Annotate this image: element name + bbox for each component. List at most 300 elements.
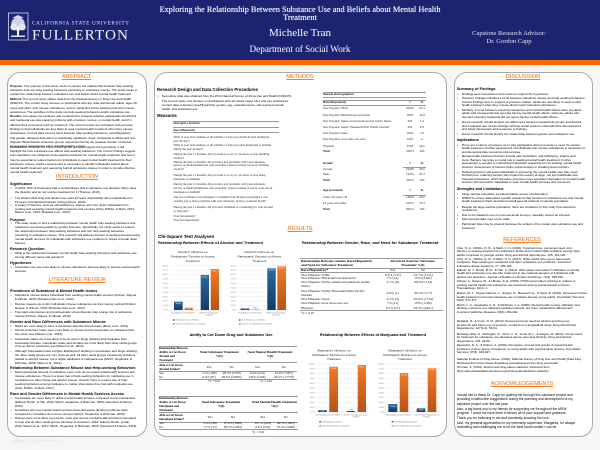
chart: marijuana and substance treatment: 100.00%	[309, 364, 316, 366]
table: sample demographics: 26312	[406, 106, 414, 110]
chart: marijuana and substance treatment: 40.00%	[310, 392, 316, 394]
strengths bullet one: Large sample population provided reliable source of information.	[462, 192, 548, 196]
table: ability to cut down alcohol: *p < 0.01	[208, 379, 221, 383]
table: ability to cut down marijuana: 8.6% (232)	[255, 425, 270, 429]
research design bullets	[158, 94, 292, 112]
table: measures descriptive statistics: past 30 days?	[174, 139, 190, 143]
significance bullet three: seeking and receiving mental health treatment and services (Choi, DiNitto, & Marti, 2014;	[15, 207, 135, 211]
chart: alcohol and mental health treatment: 70.00%	[231, 279, 237, 281]
table: ability to cut down alcohol: Relationship Between	[159, 346, 188, 350]
reference two: marijuana: Help-seeking for marijuana and other substance use problems. Journal of	[457, 260, 571, 264]
gender bullet two: any other race (Mason et al., 2013).	[15, 332, 63, 336]
table: sample demographics: 100	[420, 149, 424, 153]
chart: marijuana and substance treatment: 90.00%	[310, 368, 316, 370]
table: measures descriptive statistics: During the past 12 months, did you need treatment or counseling for your alcohol	[174, 205, 273, 209]
acknowledgement paragraph two	[456, 407, 567, 420]
table: measures descriptive statistics: or drug use?	[174, 209, 189, 213]
chart: alcohol and mental health treatment: 40.00%	[231, 292, 237, 294]
abstract results: and gender, although data was not statistically significant, need. Compared to White and non-	[10, 136, 136, 140]
research question bullet: among different races and genders?	[15, 255, 64, 259]
table: ability to cut down marijuana	[159, 396, 298, 434]
table: sample demographics: 1844	[407, 131, 413, 135]
abstract conclusion: how substance use influences help-seeking behaviors for mental health treatment and how it	[10, 153, 135, 157]
chart: marijuana and substance treatment: Participants' Decision to Access	[312, 353, 356, 357]
race and gender access heading: Race and Gender Differences in Mental Health Services Access	[10, 392, 124, 396]
table: sample demographics: 55271	[406, 207, 414, 211]
implications bullet three: services and promotion individuals to seek mental health services and resources.	[462, 180, 571, 184]
abstract method	[10, 97, 137, 114]
table: ability to cut down alcohol: *p < 0.01	[260, 379, 273, 383]
research question heading: Research Question	[10, 246, 45, 250]
reference seven: Mojtabai, R., & Crum, R. M. (2013). Perceived unmet need for alcohol and drug use	[457, 319, 569, 323]
chart: alcohol and mental health treatment: 100.00%	[230, 265, 237, 267]
reference ten: Retrieved from https://www.drugabuse.gov/national-survey-drug-use-health	[457, 361, 558, 365]
reference eleven: https://americanaddictioncenters.org/rehab-guide/addiction-statistics	[457, 369, 549, 373]
strengths bullet six: treatment.	[462, 226, 475, 230]
access bullet one	[10, 397, 135, 409]
reference seven: treatments and future use of services: results from a longitudinal study. Drug and Alcohol	[457, 322, 576, 326]
chart: marijuana and substance treatment: 50.00%	[310, 388, 316, 390]
heading: introduction: INTRODUCTION	[56, 174, 98, 180]
reference five: 64(9), 871-877.	[457, 298, 478, 302]
table: gender race need for treatment: Non-Hispanic Asian	[301, 297, 329, 301]
access bullet one: 2016).	[15, 404, 24, 408]
author name: Michelle Tran	[269, 26, 331, 38]
table: ability to cut down marijuana: Marijuana Intake*	[159, 417, 184, 421]
relationship bullet: misuse substances. There is a lower rate of help-seeking behaviors for marijuana use in	[15, 374, 133, 378]
reference six: Journal of addictive diseases, 28(4), 281-292.	[457, 310, 518, 314]
significance bullet two: 18 years old (National Institute of Drug Abuse, 2016).	[15, 200, 87, 204]
advisor credit: Dr. Gordon Capp	[487, 38, 531, 45]
poster title: Exploring the Relationship Between Substance Use and Beliefs about Mental Health	[159, 5, 441, 14]
strengths bullet two: health treatment which described overall general analysis of sample population.	[462, 199, 569, 203]
purpose bullet	[10, 222, 140, 245]
chart: marijuana and substance treatment: Did NOT Their Marijuana Causes	[344, 413, 369, 416]
acknowledgement paragraph one: capstone project over the last year.	[457, 402, 509, 406]
chart: alcohol and substance treatment: 0.00%	[163, 310, 169, 312]
table: sample demographics: 75.4	[419, 201, 425, 205]
chart: marijuana and mental health treatment: Problems	[423, 416, 431, 419]
table: measures descriptive statistics: causing you to have problems with your emotions, nerves, or mental health?	[174, 199, 266, 203]
table: sample demographics: 224	[408, 125, 412, 129]
acknowledgement paragraph one: providing constructive suggestions during the planning and development of my	[457, 397, 573, 401]
chart: alcohol and mental health treatment: 4.20%	[243, 309, 248, 311]
implications bullet two: assessment is needed to understand individuals' reasoning for not seeking mental health	[462, 161, 581, 165]
university logo: FULLERTON	[32, 26, 128, 43]
hypotheses bullet: Caucasian men are more likely to misuse substances and less likely to access mental health	[15, 265, 140, 269]
table: gender race need for treatment: 93% (5497)	[415, 276, 432, 280]
gender bullet three: Caucasian males are more likely to be at risk for binge drinking and marijuana than	[15, 337, 127, 341]
chart: alcohol and substance treatment: 20.00%	[163, 301, 169, 303]
significance bullets: the disorder and do not receive treatment for it (Thomas, 2019).	[15, 190, 101, 194]
advisor credit: Capstone Research Advisor:	[472, 30, 546, 37]
chart: alcohol and mental health treatment: Alcohol's Influence on	[244, 250, 275, 254]
chart: marijuana and mental health treatment: 20.00%	[379, 402, 385, 404]
table: sample demographics: Non-Hispanic White	[323, 106, 348, 110]
reference eight: Mulvaney-Day, N., DeAngelo, D., Chen, C. N., Cook, B. L., & Alegria, M. (2012). Unmet need	[457, 332, 582, 336]
table: measures descriptive statistics: nerves, or mental health that were probably caused or made worse by your use of	[174, 186, 272, 190]
table: measures descriptive statistics: During the past 12 months, did you have any problems with your emotions,	[174, 160, 266, 164]
chart: alcohol and substance treatment: 30.00%	[163, 296, 169, 298]
table: gender race need for treatment: 8.3% (137)	[385, 273, 401, 277]
abstract conclusion: may be essential to reduce barriers for individuals to seek mental health treatment for their	[10, 158, 132, 162]
table: gender race need for treatment: 4.1% (3)	[387, 297, 399, 301]
reference four: seeking mental health and substance use treatment among sexual assault survivors.	[457, 283, 571, 287]
table: ability to cut down marijuana: 1.7% (33)	[203, 425, 217, 429]
implications bullet three: misused substances, which therefore promotes more accurate information on mental health	[462, 177, 585, 181]
chart: marijuana and mental health treatment: Need Mental Health Treatment	[394, 420, 418, 423]
chart: alcohol and substance treatment: Alcohol's Influence on	[178, 250, 208, 254]
table: gender race need for treatment: *p < 0.01	[301, 311, 314, 315]
alcohol subheading: Relationship Between Effects of Alcohol and Treatment	[158, 240, 263, 244]
gender bullet four: Richman, 2009; Merly et al., 2014).	[15, 361, 62, 365]
significance bullets: In 2019, 20% of Americans had a mental illness and a substance use disorder. Many have	[15, 186, 136, 190]
reference list: Choi, N. G., DiNitto, D. M., & Marti, C. N. (2015). Treatment use, perceived need, and	[457, 246, 572, 250]
table: measures descriptive statistics: alcohol?	[174, 156, 184, 160]
chart: marijuana and mental health treatment: 40.00%	[379, 392, 385, 394]
reference eight: for treatment for substance use disorders across race and ethnicity. Drug and alcohol	[457, 335, 571, 339]
reference list	[456, 246, 580, 256]
table: ability to cut down alcohol: Ability to Cut Down	[159, 350, 186, 354]
table: ability to cut down alcohol: Treatment	[159, 358, 173, 362]
access bullet two: compared to nonwhites do not use services (Mirich, Negandra, & Richman, 2009).	[15, 412, 125, 416]
chart: marijuana and substance treatment: 20.00%	[310, 402, 316, 404]
reference list: adults compared to younger adults. Drug and alcohol dependence, 145, 113-120.	[457, 252, 566, 256]
relationship bullet: seeking behaviors among marijuana no matter what status they had with marijuana use	[15, 382, 133, 386]
abstract results: substances. Current data found a trend between help-seeking behaviors, race/Hispanicity,	[10, 131, 131, 135]
strengths bullet six: Participant bias may be present because the subject of the matter was substance use and	[462, 222, 583, 226]
acknowledgement paragraph two: program. I could not have done it without all of your support and guidance.	[457, 411, 567, 415]
chart: marijuana and substance treatment: Marijuana's Influence on	[317, 348, 351, 352]
research design bullets: Current data examines race/Hispanicity, gender, age, education level, self-reported overall	[162, 103, 283, 107]
chart: marijuana and substance treatment: 97.60%	[331, 368, 337, 370]
significance bullet three: Mason et al., 2013; Mojtabai et al., 2014).	[15, 210, 71, 214]
abstract method: substances. The variables in this study are help-seeking behaviors and/or substance use.	[10, 110, 131, 114]
table: sample demographics: Under 18 years old	[323, 195, 347, 199]
chi-square heading: Chi-Square Test Analyses	[158, 234, 214, 238]
reference four: Kirkner, A., Relyea, M., & Ullman, S. E. (2018). PTSD and problem drinking in relation to	[457, 279, 575, 283]
table: sample demographics: %	[421, 100, 423, 104]
panel: methods and results: Ever had depression?	[174, 218, 200, 222]
chart: alcohol and mental health treatment: Participants' Decision to Access	[238, 254, 282, 258]
summary bullet three: adults who misused alcohol reported having mental health effects; whereas, adults who	[462, 111, 579, 115]
prevalence bullet one: & Ullman, 2018; Mulvaney-Day et al., 2012).	[15, 297, 75, 301]
chart: alcohol and mental health treatment: 10.00%	[231, 305, 237, 307]
chart: alcohol and substance treatment: 50.00%	[163, 288, 169, 290]
table: sample demographics: 6734	[407, 144, 413, 148]
table: sample demographics: Race/Hispanicity	[323, 100, 346, 104]
table: sample demographics: 1251	[407, 137, 413, 141]
chart: alcohol and substance treatment: 10.00%	[163, 305, 169, 307]
chart: marijuana and substance treatment: 70.00%	[310, 378, 316, 380]
chart: alcohol and substance treatment: Treatment	[186, 259, 200, 263]
chart: alcohol and substance treatment: Did NOT Their Alcohol Causes Problems	[176, 323, 206, 326]
summary bullet two: health treatment when they misuse alcohol and marijuana substances.	[462, 103, 557, 107]
gender bullet one: Males are more likely to have a substance disorder than females (Merly et al., 2014).	[15, 324, 129, 328]
table: sample demographics: Non-Hispanic Native American/American Indian Native	[323, 119, 392, 123]
strengths bullet three	[457, 206, 576, 213]
reference eight: dependence, 125, 44-50.	[457, 339, 491, 343]
heading: references: REFERENCES	[503, 236, 541, 242]
summary bullet one: Findings were inconsistent and could not support the hypothesis.	[462, 92, 549, 96]
table: sample demographics: 4.4	[420, 131, 424, 135]
abstract results: Hispanic Black/African American groups responded having the greatest number of alcohol	[10, 140, 131, 144]
gender bullet two: African American males were more likely to misuse and be dependent on marijuana than	[15, 328, 134, 332]
implications heading: Implications	[457, 138, 479, 142]
chart: marijuana and mental health treatment: 70.00%	[379, 378, 385, 380]
table: ability to cut down alcohol: 91.6% (7607)	[275, 371, 293, 375]
table: sample demographics: 18 years and older	[323, 201, 347, 205]
table: ability to cut down marijuana: Ability to Cut Down	[159, 400, 186, 404]
table: sample demographics: Total	[323, 178, 330, 182]
chart: marijuana and mental health treatment: 30.00%	[379, 397, 385, 399]
chart: marijuana and mental health treatment: 82.70%	[401, 374, 407, 376]
table: gender race need for treatment: Non-Hispanic more than one race	[301, 301, 348, 305]
chart: alcohol and mental health treatment: 0.90%	[253, 308, 258, 310]
chart: alcohol and mental health treatment: 99.10%	[279, 268, 285, 270]
reference eight	[456, 332, 582, 343]
table: gender race need for treatment: Native	[301, 284, 310, 288]
table: ability to cut down alcohol: No	[159, 375, 163, 379]
reference five: Mason, M. J., Keyser-Marcus, L., Snipes, D., Benotsch, E., & Sood, B. (2013). Perceived mental	[457, 291, 586, 295]
table: sample demographics: 19412	[406, 172, 414, 176]
chart: alcohol and substance treatment: 81.20%	[202, 276, 208, 278]
access bullet three: to men and all other racial groups (Norhrup & Gunnison, 2018; Edlund, Booth, & Han,	[15, 420, 130, 424]
table: sample demographics: Male	[323, 172, 329, 176]
chart: alcohol and substance treatment: 40.00%	[163, 292, 169, 294]
chart: alcohol and substance treatment: Their Alcohol Causes Problems	[171, 311, 195, 314]
reference eleven	[456, 365, 550, 373]
implications bullet two: more. Barriers may play a crucial role in seeking mental health treatment. Further	[462, 158, 571, 162]
chart: alcohol and substance treatment: 94.50%	[212, 270, 218, 272]
table: sample demographics: 0.5	[420, 125, 424, 129]
orange stripe	[0, 60, 600, 65]
abstract results: affected their perceived need for treatment. The current results are consistent with previous	[10, 123, 133, 127]
summary bullet four	[457, 121, 581, 132]
chart: alcohol and mental health treatment: 95.80%	[269, 270, 275, 272]
summary bullet four: and adapt intervention and resources to findings.	[462, 127, 528, 131]
gender bullet four: Although Caucasians have a higher likelihood of drinking to intoxication and binge drinking,	[15, 349, 138, 353]
abstract text: explain the relationship between substance use and beliefs about mental health treatment.	[10, 92, 132, 96]
table: ability to cut down alcohol: 1.5% (109)	[202, 371, 216, 375]
prevalence bullet two: Diverse reasons as to why individuals choose substances as their coping method (Kirkner,	[15, 302, 136, 306]
table: sample demographics: f	[410, 100, 411, 104]
table: sample demographics: 1.6	[420, 119, 424, 123]
strengths bullet four: Due to the dataset's use of cross-sectional surveys, causality cannot be inferred.	[462, 213, 570, 217]
reference five: health treatment need and substance use correlates among young adults. Psychiatric Services,	[457, 295, 585, 299]
reference three	[456, 268, 579, 279]
significance heading: Significance	[10, 182, 32, 186]
heading: acknowledgements: ACKNOWLEDGEMENTS	[491, 380, 553, 386]
chart: marijuana and mental health treatment: 50.00%	[379, 388, 385, 390]
table: ability to cut down marijuana: Need Substance Treatment	[202, 400, 240, 404]
table: ability to cut down marijuana: 98.3% (2582)	[224, 425, 242, 429]
summary bullet five: Future research should identify the relationship between gender and substance use.	[462, 132, 575, 136]
acknowledgement paragraph two: Also, a big thank you to my friends for supporting me throughout the MSW	[457, 407, 566, 411]
strengths bullet two: NSDUH's survey data asked specific questions that focused on substance use and mental	[462, 196, 583, 200]
chart: marijuana and mental health treatment: Marijuana's Influence on	[388, 348, 422, 352]
abstract method: Method: The current study utilizes data from the National Survey on Drug Use and Health	[10, 97, 131, 101]
summary bullet three: reported misusing marijuana did not report having mental health effects.	[462, 115, 559, 119]
hypotheses heading: Hypotheses	[10, 260, 32, 264]
chart: alcohol and mental health treatment: Treatment	[252, 259, 266, 263]
poster footer credit	[12, 440, 60, 444]
table: gender race need for treatment: 93% (1109)	[415, 301, 432, 305]
table: ability to cut down marijuana: No	[231, 415, 235, 419]
table: sample demographics: Sample Demographics	[323, 92, 354, 96]
implications bullet one: provide appropriate resources and services.	[462, 150, 521, 154]
table: sample demographics: %	[421, 188, 423, 192]
table: sample demographics: 22259	[406, 167, 414, 171]
table: measures descriptive statistics: Race/Hispanicity	[174, 128, 195, 132]
access bullet one: Caucasians are more likely to utilize mental health services compared to non-Caucasians	[15, 396, 135, 400]
table: sample demographics: f	[410, 161, 411, 165]
summary bullet three: Similarly, a trend between misusing substances and mental health effects were prevalent;	[462, 108, 582, 112]
abstract conclusion: highlight the how substance use affects help-seeking behaviors. The current findings suggest	[10, 149, 135, 153]
table: sample demographics: Total	[323, 149, 330, 153]
chart: marijuana and substance treatment: Treatment	[327, 357, 341, 361]
marijuana relationship heading: Relationship Between Effects of Marijuana and Treatment	[320, 332, 426, 337]
table: ability to cut down alcohol: No	[282, 365, 286, 369]
chart: alcohol and mental health treatment: Did NOT Their Alcohol Causes Problems	[242, 323, 272, 326]
acknowledgement paragraph one	[456, 393, 573, 406]
chart: alcohol and substance treatment: 18.80%	[176, 303, 182, 305]
purpose bullet: mental health services for individuals with substance use problems in hopes to break down	[15, 237, 137, 241]
table: sample demographics: 41671	[406, 149, 414, 153]
acknowledgement paragraph one: I would like to thank Dr. Capp for guiding me through this capstone project and	[457, 393, 573, 397]
table: ability to cut down alcohol: No	[230, 365, 234, 369]
chart: alcohol and mental health treatment: 60.00%	[231, 283, 237, 285]
reference six: drinking outcomes in a national population sample: are there racial/ethnic differences?.	[457, 306, 574, 310]
table: sample demographics: f	[410, 188, 411, 192]
implications bullet one: There are a variety of reasons as to why participants did not perceive a need for mental	[462, 143, 579, 147]
table: ability to cut down alcohol: Able to Cut Down	[159, 363, 183, 367]
table: sample demographics: 41671	[406, 178, 414, 182]
table: ability to cut down marijuana: 2.4% (46)	[203, 421, 217, 425]
table: gender race need for treatment: Yes	[390, 268, 395, 272]
header band	[0, 0, 600, 65]
chart: marijuana and mental health treatment: 91.40%	[429, 370, 435, 372]
chart: alcohol and substance treatment: 80.00%	[163, 274, 169, 276]
table: ability to cut down marijuana: Yes	[207, 415, 213, 419]
table: gender race need for treatment: Non-Hispanic Native American/American Indian	[301, 280, 370, 284]
acknowledgement paragraph three: Last, my greatest appreciation to my internship supervisor, Margarita, for always	[457, 421, 575, 425]
table: ability to cut down alcohol: 98.5% (7250)	[223, 371, 241, 375]
table: ability to cut down alcohol: 6.8% (1299)	[249, 375, 266, 379]
relationship bullet	[10, 371, 135, 391]
chart: marijuana and mental health treatment	[378, 348, 440, 428]
chart: alcohol and mental health treatment: 0.00%	[231, 310, 237, 312]
significance bullet two	[10, 197, 133, 204]
chart: alcohol and substance treatment: Their Alcohol Causes Problems	[176, 319, 199, 322]
abstract text: behaviors and non help-seeking behaviors pertaining to substance misuse. The study seeks to	[10, 88, 137, 92]
table: ability to cut down alcohol: 99.6% (20395)	[222, 375, 242, 379]
purpose bullet: This study seeks to find a relationship between mental health help-seeking behaviors and	[15, 221, 135, 225]
hypotheses bullet: services.	[15, 269, 27, 273]
table: sample demographics: Non-Hispanic more than one race	[323, 137, 366, 141]
strengths bullet three: considered.	[462, 208, 477, 212]
prevalence bullet three: Traumatic experiences and posttraumatic stress disorder play a large role in substance	[15, 310, 132, 314]
abstract conclusion	[10, 145, 136, 174]
chart: alcohol and substance treatment: 5.50%	[186, 309, 192, 311]
table: gender race need for treatment: 9.6% (1)	[387, 291, 399, 295]
table: ability to cut down alcohol: Yes	[206, 365, 212, 369]
abstract results: consumption compared to other race/Hispanicity groups.	[10, 144, 86, 148]
table: measures descriptive statistics: during the past 30 days?	[174, 147, 203, 151]
table: ability to cut down alcohol: Yes	[159, 371, 164, 375]
reference ten	[457, 357, 582, 365]
panel: discussion, references, acknowledgements	[454, 72, 592, 437]
significance bullet two: The lifetime illicit drug and alcohol use rates increase dramatically when individuals turn	[15, 196, 133, 200]
table: sample demographics: 100	[420, 207, 424, 211]
prevalence bullet three: misuse (Kirkner, Relyea, & Ullman, 2018).	[15, 314, 71, 318]
heading: literature review: LITERATURE REVIEW	[48, 277, 106, 283]
prevalence heading: Prevalence of Substance & Mental Health Issues	[10, 289, 97, 293]
chart: alcohol and substance treatment: 70.00%	[163, 279, 169, 281]
chart: alcohol and mental health treatment: 30.00%	[231, 296, 237, 298]
department: Department of Social Work	[250, 44, 350, 54]
table: gender race need for treatment: Treatment %(f)	[401, 263, 424, 267]
research question bullet: What is the relationship between mental health help-seeking behaviors and substance use	[15, 251, 137, 255]
summary bullet three	[457, 109, 582, 119]
table: gender race need for treatment: Perceived Need for Substance	[391, 259, 435, 263]
table: ability to cut down marijuana: No	[284, 415, 288, 419]
implications bullet two: services. Assessment of barriers helps social workers in breaking down barriers.	[462, 164, 570, 168]
access bullet three	[10, 417, 137, 429]
access bullet one: (Edlund, Booth, & Han, 2012; Mirich, Negandra, & Richman, 2009; Narendorf & Palmer,	[15, 400, 133, 404]
abstract conclusion: mental health treatment.	[10, 170, 43, 174]
reference seven: Dependence, 127(1-3), 59-64.	[457, 326, 498, 330]
summary of findings heading: Summary of Findings	[457, 87, 496, 91]
table: ability to cut down marijuana: %(f)	[271, 404, 278, 408]
significance bullet three	[10, 204, 135, 215]
table: sample demographics: 24.6	[419, 195, 425, 199]
chart: marijuana and substance treatment: 10.00%	[310, 407, 316, 409]
university logo	[8, 12, 129, 43]
table: gender race need for treatment: 3.1% (9)	[387, 280, 399, 284]
gender bullet four	[10, 350, 138, 366]
table: ability to cut down marijuana: Relationship Between	[159, 396, 188, 400]
prevalence bullet one: Substance misuse deters individuals from seeking mental health services (Kirkner, Relyea,	[15, 293, 137, 297]
chart: marijuana and mental health treatment: 100.00%	[378, 364, 385, 366]
table: measures descriptive statistics: During the past 12 months, did you want to or try to cut down or stop using	[174, 173, 266, 177]
purpose heading: Purpose	[10, 218, 25, 222]
table: ability to cut down marijuana: Yes	[260, 415, 265, 419]
chart: alcohol and mental health treatment: Treatment	[272, 314, 280, 317]
access bullet two	[10, 409, 128, 417]
chart: marijuana and substance treatment: 2.40%	[320, 411, 325, 413]
significance bullet three: A variety of barriers, such as self-sufficiency, stigma, and cost, deter individuals from	[15, 203, 128, 207]
table: gender race need for treatment: 7% (11)	[387, 301, 398, 305]
research question bullet	[10, 252, 137, 259]
relationship bullet: comparison to other drugs and alcohol misuse. Overall, there is a lower rate of help-	[15, 378, 128, 382]
purpose bullet: the relationship between help-seeking behaviors and non help-seeking behaviors	[15, 229, 124, 233]
table: sample demographics: Female	[323, 167, 332, 171]
panel: methods and results	[154, 72, 447, 437]
prevalence bullet two	[10, 303, 136, 310]
chart: marijuana and substance treatment: Did NOT Need Substance Treatment	[322, 425, 350, 428]
table: gender race need for treatment: Non-Hispanic Black/African American	[301, 276, 356, 280]
abstract results: Results: Chi-square test analysis was conducted to measure whether participants felt alcohol	[10, 114, 136, 118]
ability to cut down heading: Ability to Cut Down Drug and Substance Use	[189, 332, 273, 337]
table: gender race need for treatment: 91.7% (1511)	[414, 273, 433, 277]
table: sample demographics: 13600	[406, 195, 414, 199]
chart: marijuana and mental health treatment: 90.00%	[379, 368, 385, 370]
purpose bullet: pertaining to substance misuse. This research will address barriers to seeking and accessing	[15, 233, 140, 237]
poster title	[159, 5, 441, 22]
access bullet three: 2012; Mason et al., 2013; Mirich, Negandra, & Richman, 2009; Narendorf & Palmer, 2016).	[15, 424, 137, 428]
chart: alcohol and mental health treatment: 90.00%	[231, 270, 237, 272]
